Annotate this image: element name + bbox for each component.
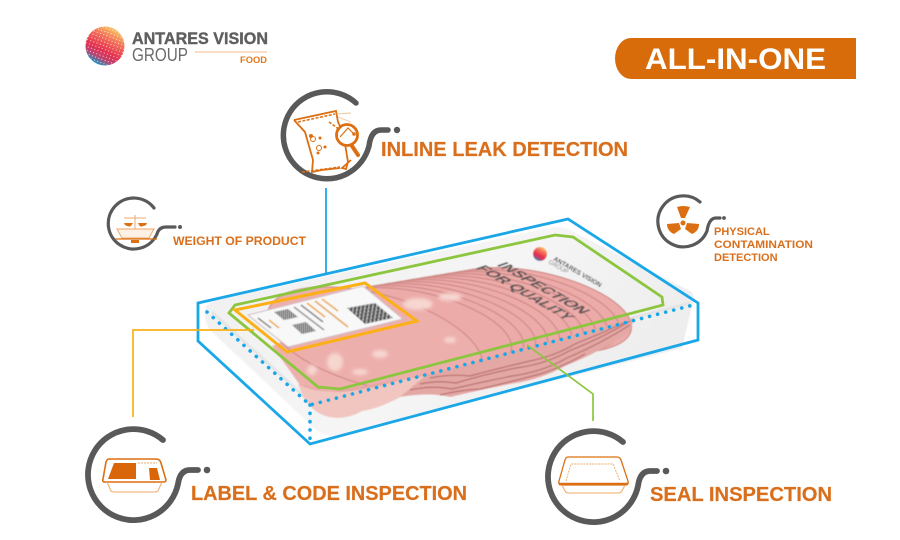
product label	[248, 286, 403, 347]
icon: label and code inspection	[88, 429, 210, 520]
logo: Antares Vision Group Food: GROUP	[132, 44, 188, 65]
magnifier	[336, 124, 358, 146]
connector: leak detection to package	[325, 188, 327, 273]
QR code	[347, 303, 393, 324]
heading: label and code inspection: LABEL & CODE INSPECTION	[191, 483, 467, 505]
heading: physical contamination detection: PHYSICAL	[714, 226, 770, 238]
meat base area	[272, 288, 600, 394]
blue outline: inline leak detection box	[198, 219, 698, 444]
heading: physical contamination detection	[714, 226, 813, 264]
icon: physical contamination	[658, 196, 726, 247]
lower front slice edge	[298, 376, 425, 418]
barcodes	[274, 309, 298, 320]
tray text: inspection for quality: INSPECTION	[492, 261, 593, 316]
heading: seal inspection: SEAL INSPECTION	[650, 484, 832, 506]
connector: seal inspection	[527, 345, 593, 421]
tray logo: ANTARES VISION	[552, 256, 603, 289]
tray body	[205, 227, 694, 436]
meat slices	[235, 250, 660, 415]
heading: weight of product: WEIGHT OF PRODUCT	[173, 234, 307, 248]
icon: seal inspection	[548, 431, 669, 522]
green outline: seal area	[229, 235, 663, 389]
heading: inline leak detection: INLINE LEAK DETECTION	[381, 138, 628, 161]
tray rim	[212, 303, 690, 402]
logo: Antares Vision Group Food: ANTARES VISION	[132, 29, 268, 48]
pouch	[294, 111, 351, 172]
heading: physical contamination detection: DETECTION	[714, 252, 778, 264]
label text lines	[258, 299, 348, 330]
meat stack side	[298, 318, 634, 418]
tray logo	[533, 247, 603, 289]
logo: Antares Vision Group Food: FOOD	[240, 55, 267, 66]
tray text: inspection for quality: FOR QUALITY	[471, 264, 578, 322]
stack layer lines	[410, 321, 630, 395]
package photo: meat tray	[205, 227, 694, 436]
yellow outline: label area	[235, 283, 417, 352]
tray logo: GROUP	[547, 260, 569, 276]
logo: Antares Vision Group Food	[86, 26, 268, 66]
icon: weight of product	[108, 198, 182, 249]
connector: label and code inspection	[133, 330, 254, 417]
heading: physical contamination detection: CONTAMINATION	[714, 239, 813, 251]
fat spots	[307, 293, 462, 375]
icon: inline leak detection	[283, 92, 400, 179]
badge: ALL-IN-ONE	[615, 38, 856, 79]
badge: ALL-IN-ONE: ALL-IN-ONE	[645, 43, 826, 76]
